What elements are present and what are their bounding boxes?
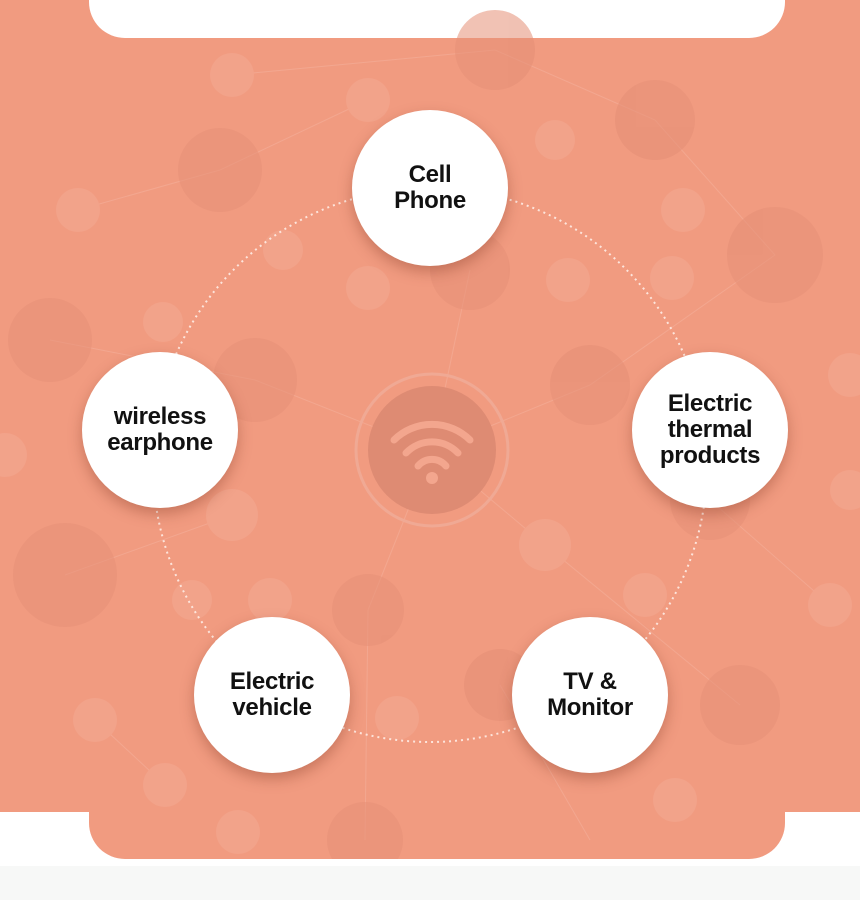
node: Cell Phone: Phone [394,187,466,214]
node: Electric thermal products: products [660,442,760,469]
node: Cell Phone [352,110,508,266]
node: wireless earphone: earphone [107,429,213,456]
bottom tab [89,790,785,859]
node: Cell Phone: Cell [409,161,451,188]
bottom pale strip [0,866,860,900]
node: Electric vehicle: vehicle [232,694,312,721]
node: Electric vehicle: Electric [230,668,314,695]
top white panel [89,0,785,38]
node: TV & Monitor: Monitor [547,694,633,721]
node: Electric thermal products: Electric [668,390,752,417]
node: TV & Monitor: TV & [563,668,617,695]
node: Electric vehicle [194,617,350,773]
node: wireless earphone: wireless [114,403,206,430]
center wifi icon [354,372,510,528]
node: Electric thermal products: thermal [668,416,752,443]
node: wireless earphone [82,352,238,508]
node: Electric thermal products [632,352,788,508]
node: TV & Monitor [512,617,668,773]
